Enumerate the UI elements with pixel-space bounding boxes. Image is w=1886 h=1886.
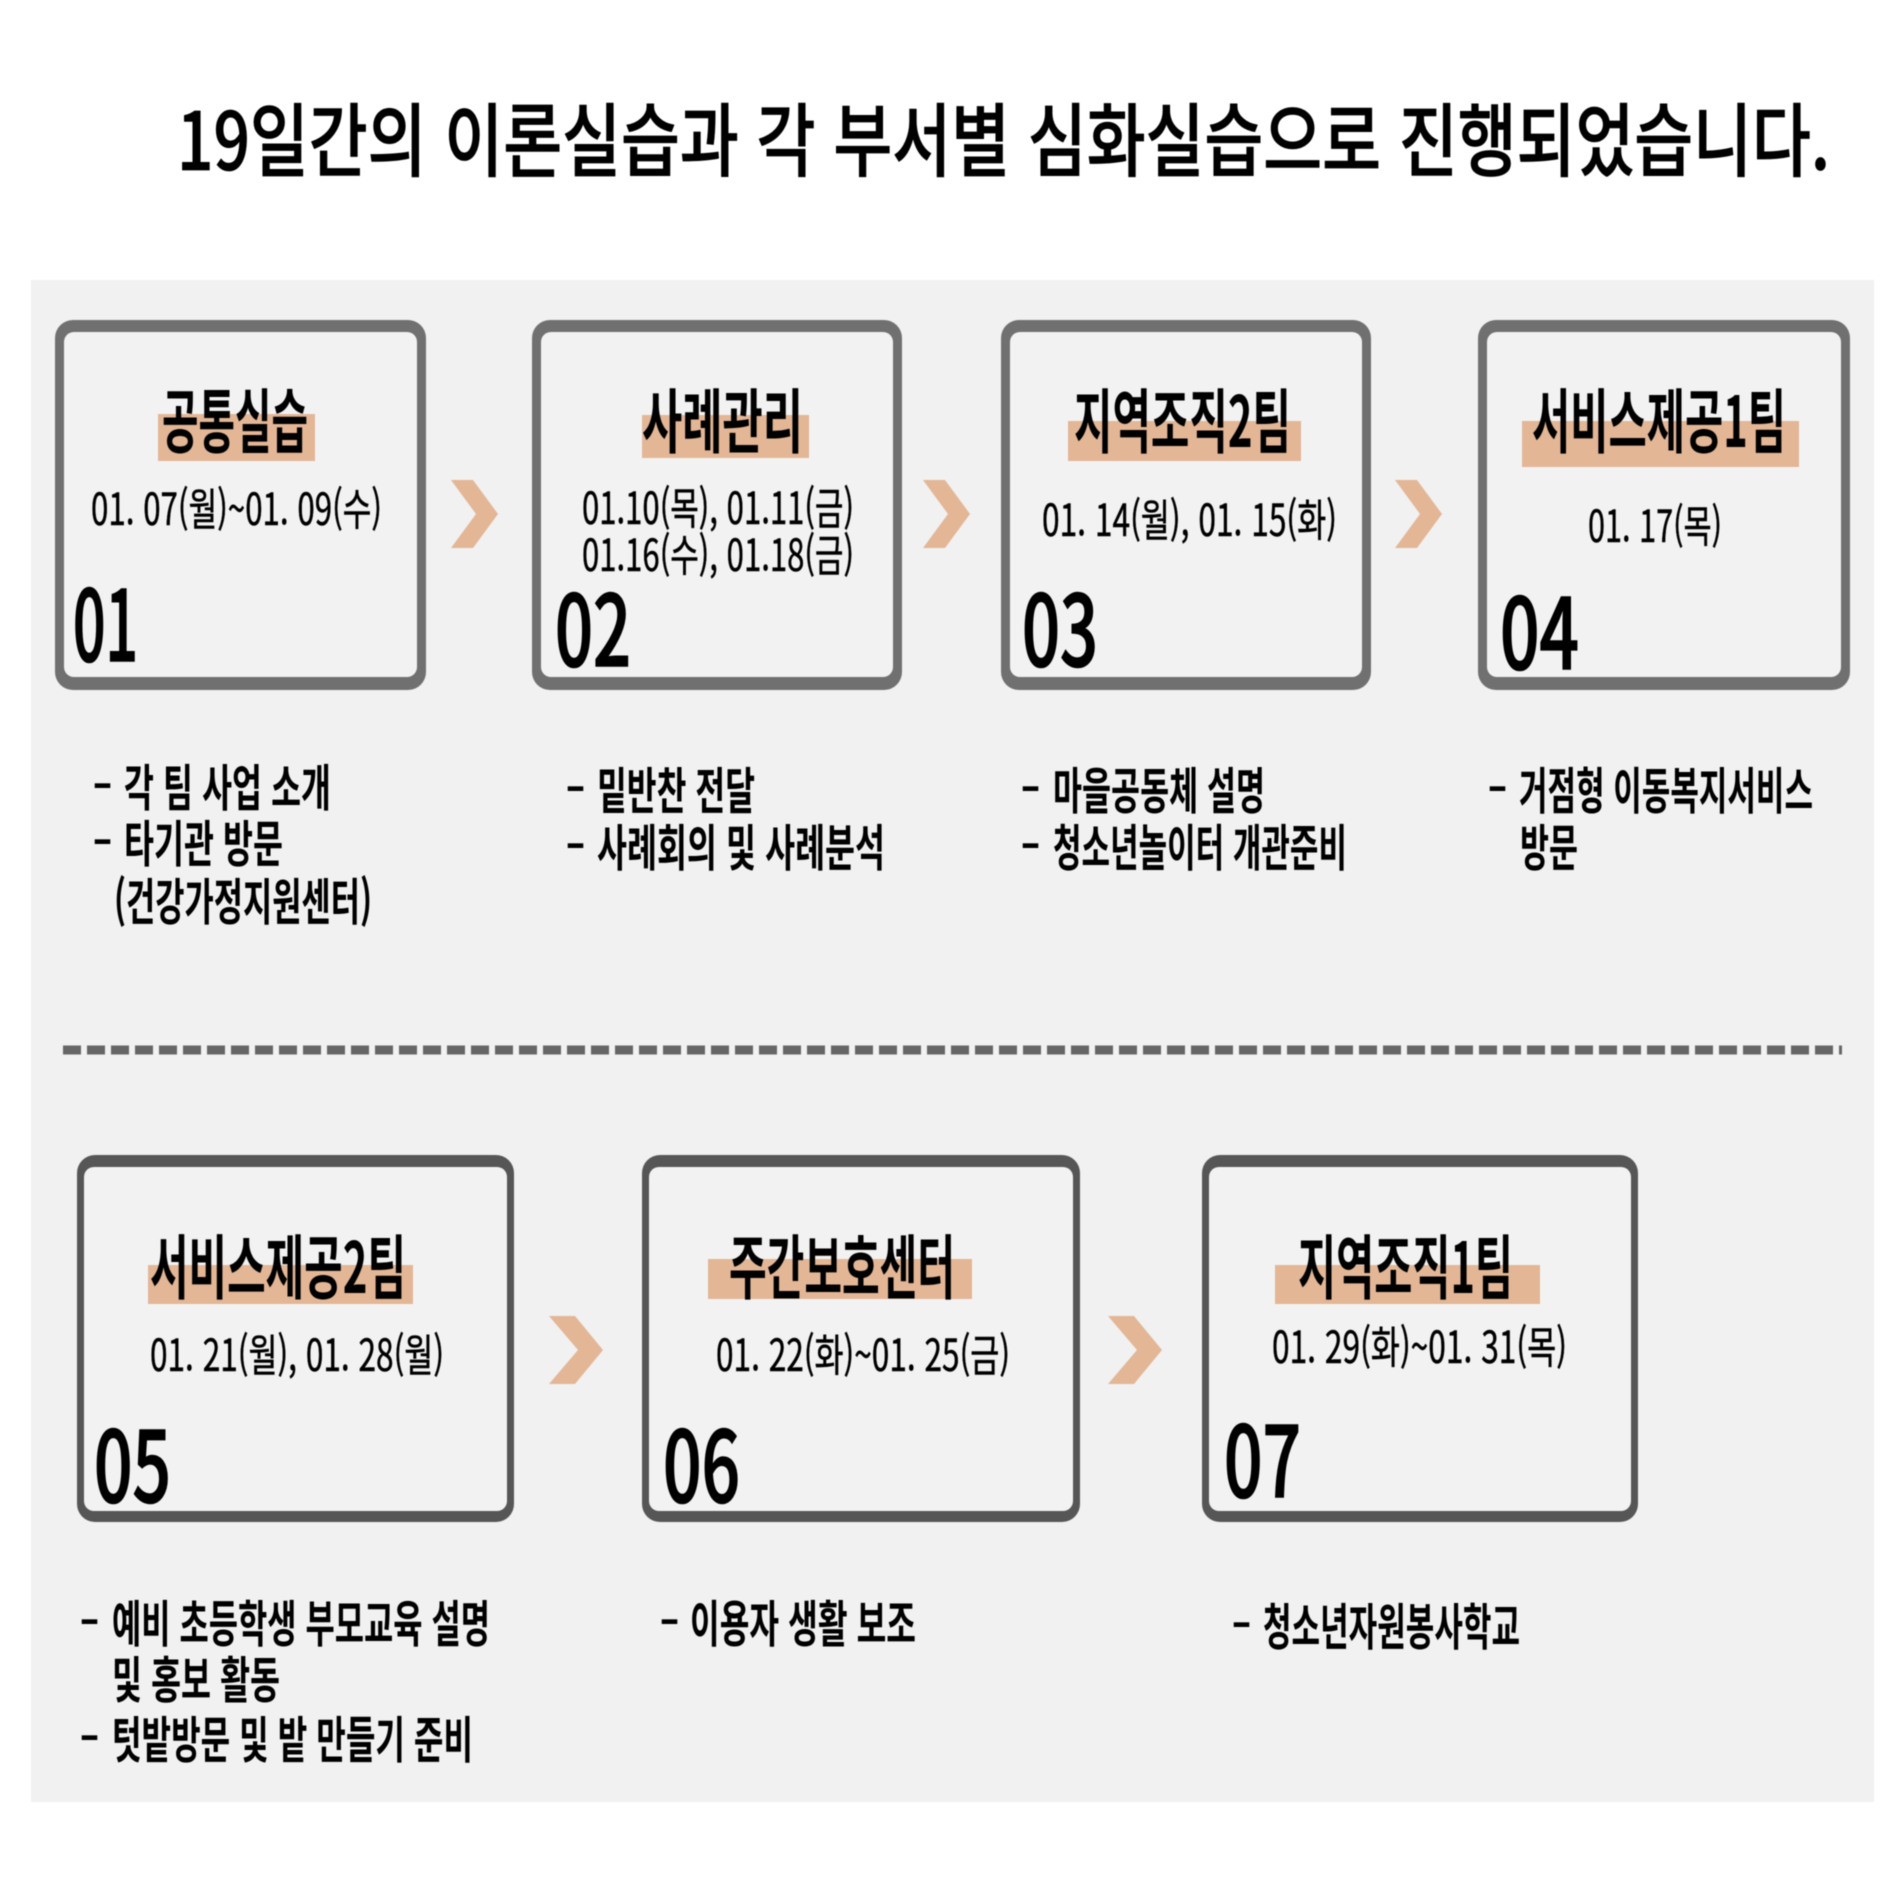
description 02: 밑반찬 전달: [597, 752, 755, 824]
card 04: [1478, 320, 1850, 698]
card 01 number: 01: [73, 548, 138, 690]
card 07: [1202, 1155, 1638, 1526]
arrow 1: [451, 480, 498, 548]
description 01: –: [93, 799, 112, 871]
card 02 title: 사례관리: [642, 367, 803, 468]
card 07 title: 지역조직1팀: [1298, 1213, 1513, 1314]
description 03: –: [1021, 803, 1040, 875]
card 03 date: 01. 14(월), 01. 15(화): [1042, 485, 1337, 549]
description 01: –: [93, 743, 112, 815]
card 01: [55, 320, 426, 690]
card 02 date line 2: 01.16(수), 01.18(금): [582, 520, 854, 584]
description 02: [566, 746, 885, 881]
card 02 number: 02: [555, 553, 631, 695]
arrow 3: [1395, 480, 1442, 548]
card 05: [77, 1155, 514, 1531]
card 01 title highlight: [158, 414, 315, 461]
card 06 number: 06: [663, 1389, 740, 1531]
description 05: 및 홍보 활동: [112, 1641, 280, 1713]
description 02: –: [566, 746, 585, 818]
description 02: –: [566, 803, 585, 875]
description 07: –: [1232, 1582, 1251, 1654]
description 06: [660, 1579, 916, 1657]
description 04: [1488, 746, 1813, 881]
description 04: –: [1488, 746, 1507, 818]
card 05 title highlight: [148, 1265, 413, 1304]
panel: background: [31, 280, 1874, 1802]
description 05: 텃밭방문 및 밭 만들기 준비: [112, 1701, 473, 1773]
description 05: –: [80, 1579, 99, 1651]
description 01: 타기관 방문: [124, 805, 283, 877]
description 05: [80, 1579, 490, 1773]
card 07 number: 07: [1224, 1384, 1301, 1526]
arrow 5: [1108, 1316, 1162, 1384]
description 03: 청소년놀이터 개관준비: [1053, 809, 1347, 881]
description 07: 청소년자원봉사학교: [1263, 1588, 1520, 1660]
description 01: [93, 743, 372, 935]
description 06: –: [660, 1579, 679, 1651]
description 01: 각 팀 사업 소개: [124, 749, 331, 821]
card 07 date: 01. 29(화)~01. 31(목): [1272, 1312, 1567, 1376]
arrow 2: [923, 480, 970, 548]
description 07: [1232, 1582, 1520, 1660]
card 03: [1001, 320, 1371, 695]
card 02: [532, 320, 902, 695]
description 06: 이용자 생활 보조: [690, 1585, 916, 1657]
divider: dashed line: [63, 1046, 1842, 1054]
description 03: 마을공동체 설명: [1053, 752, 1265, 824]
description 03: [1021, 746, 1347, 881]
card 06 title: 주간보호센터: [729, 1213, 955, 1314]
card 06: [642, 1155, 1080, 1531]
description 03: –: [1021, 746, 1040, 818]
card 07 title highlight: [1275, 1265, 1540, 1304]
card 05 date: 01. 21(월), 01. 28(월): [150, 1320, 444, 1384]
card 05 title: 서비스제공2팀: [150, 1213, 406, 1314]
card 03 title highlight: [1068, 421, 1301, 461]
description 01: (건강가정지원센터): [114, 863, 372, 935]
card 03 number: 03: [1022, 553, 1098, 695]
card 03 title: 지역조직2팀: [1074, 367, 1291, 468]
card 04 date: 01. 17(목): [1588, 491, 1722, 555]
card 06 date: 01. 22(화)~01. 25(금): [716, 1320, 1010, 1384]
card 06 title highlight: [708, 1259, 972, 1299]
card 04 title highlight: [1522, 421, 1799, 467]
card 01 date: 01. 07(월)~01. 09(수): [91, 474, 382, 538]
card 02 title highlight: [642, 415, 809, 458]
card 05 number: 05: [94, 1389, 171, 1531]
arrow 4: [549, 1316, 603, 1384]
description 02: 사례회의 및 사례분석: [597, 809, 885, 881]
description 04: 방문: [1520, 809, 1578, 881]
description 05: –: [80, 1695, 99, 1767]
description 05: 예비 초등학생 부모교육 설명: [112, 1585, 490, 1657]
card 04 number: 04: [1500, 556, 1579, 698]
card 02 date line 1: 01.10(목), 01.11(금): [582, 473, 854, 537]
card 01 title: 공통실습: [162, 367, 308, 468]
